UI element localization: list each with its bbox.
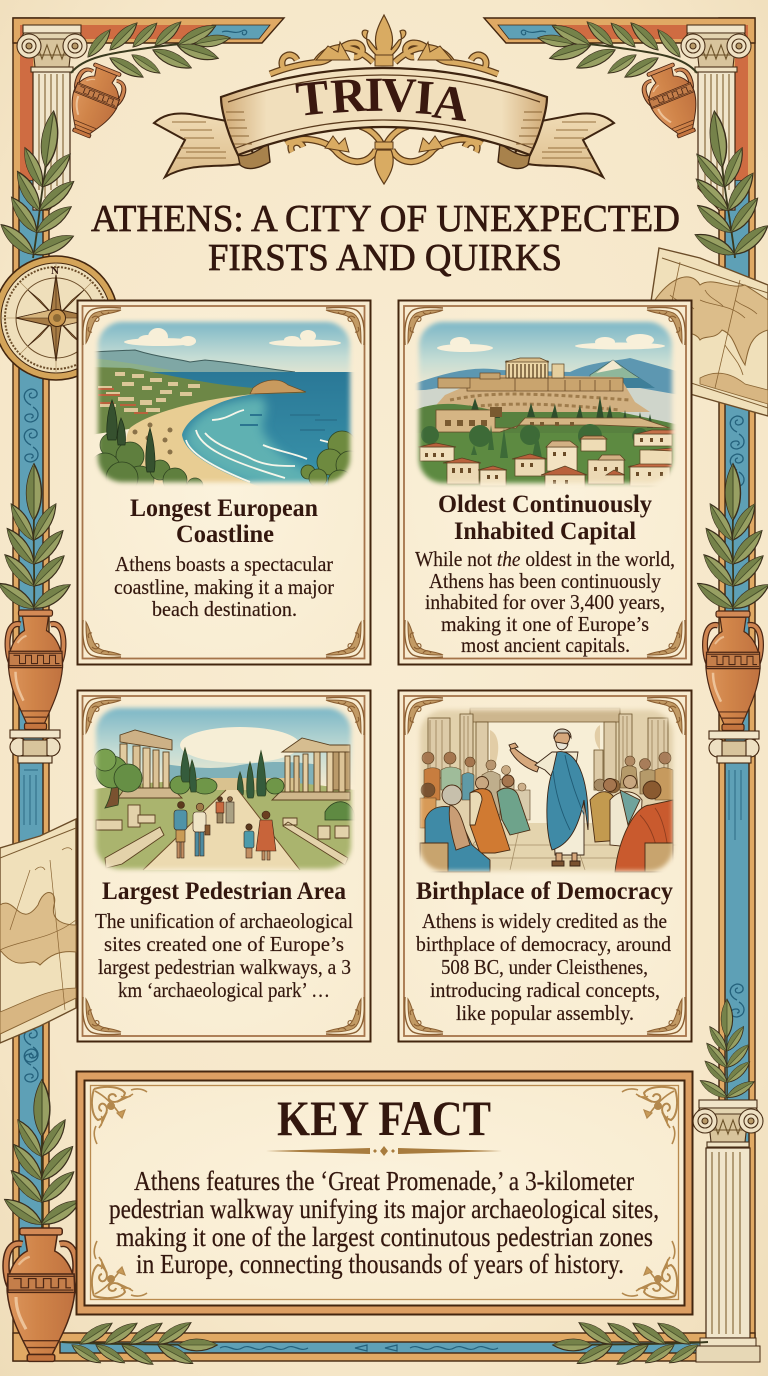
card: pedestrian area [78, 690, 370, 1042]
heading: Coastline [176, 519, 274, 548]
body text: making it one of Europe’s [441, 612, 649, 636]
right temple [272, 738, 350, 800]
body text [114, 552, 334, 621]
card: birthplace of democracy [398, 690, 692, 1042]
heading [130, 493, 318, 548]
column: top right [681, 25, 751, 210]
heading [438, 489, 652, 545]
body text: km ‘archaeological park’ … [118, 978, 330, 1002]
vase: middle left [8, 610, 63, 729]
illustration: coastline [94, 318, 354, 486]
city buildings [418, 430, 676, 488]
panel: key fact [76, 1072, 692, 1314]
heading: Oldest Continuously [438, 489, 652, 518]
seated listeners [420, 775, 673, 872]
frame: band scroll patterns [24, 389, 744, 1082]
left temple [118, 730, 182, 798]
heading: Birthplace of Democracy [416, 876, 673, 905]
frame: top right band [484, 18, 755, 43]
compass [0, 256, 118, 380]
key fact body: pedestrian walkway unifying its major archaeological sites, [109, 1194, 659, 1224]
banner: left tail [154, 113, 270, 177]
banner: ornament above [270, 15, 498, 74]
banner: title TRIVIA: TRIVIA [293, 67, 472, 132]
compass letter N: N [51, 265, 59, 277]
vase: middle right [705, 611, 761, 730]
divider ornament [266, 1146, 502, 1156]
frame: right band [719, 18, 755, 1361]
frame: left band [13, 18, 49, 1361]
body text: While not the oldest in the world, [415, 547, 675, 571]
map: left [0, 819, 76, 1043]
key fact body [109, 1166, 659, 1279]
trees [94, 748, 355, 820]
foreground figures [442, 785, 462, 805]
vase: top left [59, 59, 130, 144]
body text: sites created one of Europe’s [104, 932, 344, 956]
key fact heading: KEY FACT [277, 1090, 491, 1146]
banner: main ribbon [221, 68, 547, 155]
body text: Athens boasts a spectacular [115, 552, 333, 576]
body text: largest pedestrian walkways, a 3 [98, 955, 351, 979]
vase: top right [638, 59, 709, 144]
headline: ATHENS: A CITY OF UNEXPECTED [91, 198, 680, 240]
body text [415, 547, 675, 657]
headline [91, 198, 680, 279]
body text: beach destination. [152, 597, 297, 621]
frame: bottom band [13, 1333, 755, 1361]
laurel branch: top right [537, 18, 697, 82]
body text: 508 BC, under Cleisthenes, [441, 955, 648, 979]
card: oldest capital [398, 300, 692, 664]
laurel branch: top left [71, 18, 231, 82]
banner: ornament below [286, 126, 482, 184]
walkway [143, 790, 300, 870]
key fact body: making it one of the largest continutous pedestrian zones [116, 1222, 653, 1252]
olive sprig: lower left [1, 1080, 83, 1230]
map: right [640, 248, 768, 416]
column: top left [17, 25, 87, 210]
body text: Athens is widely credited as the [422, 909, 667, 933]
fleur-de-lis top [362, 15, 406, 56]
key fact body: Athens features the ‘Great Promenade,’ a 3-kilometer [134, 1166, 634, 1196]
laurel branch: bottom right [553, 1318, 708, 1369]
illustration: archaeological walkway [90, 700, 360, 875]
illustration: assembly [418, 708, 676, 873]
vase: lower left [6, 1228, 76, 1361]
laurel branch: bottom left [62, 1318, 217, 1369]
body text [95, 909, 353, 1002]
walking people [174, 796, 276, 860]
illustration: acropolis [410, 315, 680, 488]
olive sprig: upper right [675, 106, 768, 265]
olive sprig: upper left [0, 106, 93, 265]
body text: inhabited for over 3,400 years, [425, 590, 665, 614]
stone blocks [96, 805, 349, 868]
body text: most ancient capitals. [461, 633, 630, 657]
heading: Largest Pedestrian Area [102, 876, 346, 905]
column: lower right [693, 1100, 763, 1362]
capital: middle right [709, 731, 759, 763]
olive sprig: middle left [0, 464, 73, 614]
speaker [509, 729, 588, 866]
key fact body: in Europe, connecting thousands of years of history. [136, 1249, 624, 1279]
headline: FIRSTS AND QUIRKS [208, 237, 562, 279]
body text: introducing radical concepts, [430, 978, 660, 1002]
olive sprig: middle right [694, 464, 768, 614]
body text: The unification of archaeological [95, 909, 353, 933]
olive sprig: lower right [698, 999, 757, 1101]
body text: birthplace of democracy, around [416, 932, 671, 956]
capital: middle left [10, 730, 60, 763]
body text: coastline, making it a major [114, 575, 334, 599]
banner: right tail [498, 113, 614, 177]
parthenon [505, 358, 564, 378]
frame: top left band [13, 18, 284, 43]
heading: Inhabited Capital [454, 516, 636, 545]
body text: Athens has been continuously [429, 569, 661, 593]
body text [416, 909, 671, 1025]
card: longest coastline [78, 300, 370, 664]
body text: like popular assembly. [456, 1001, 634, 1025]
banner [154, 15, 614, 184]
heading: Longest European [130, 493, 318, 522]
back row [420, 752, 673, 828]
